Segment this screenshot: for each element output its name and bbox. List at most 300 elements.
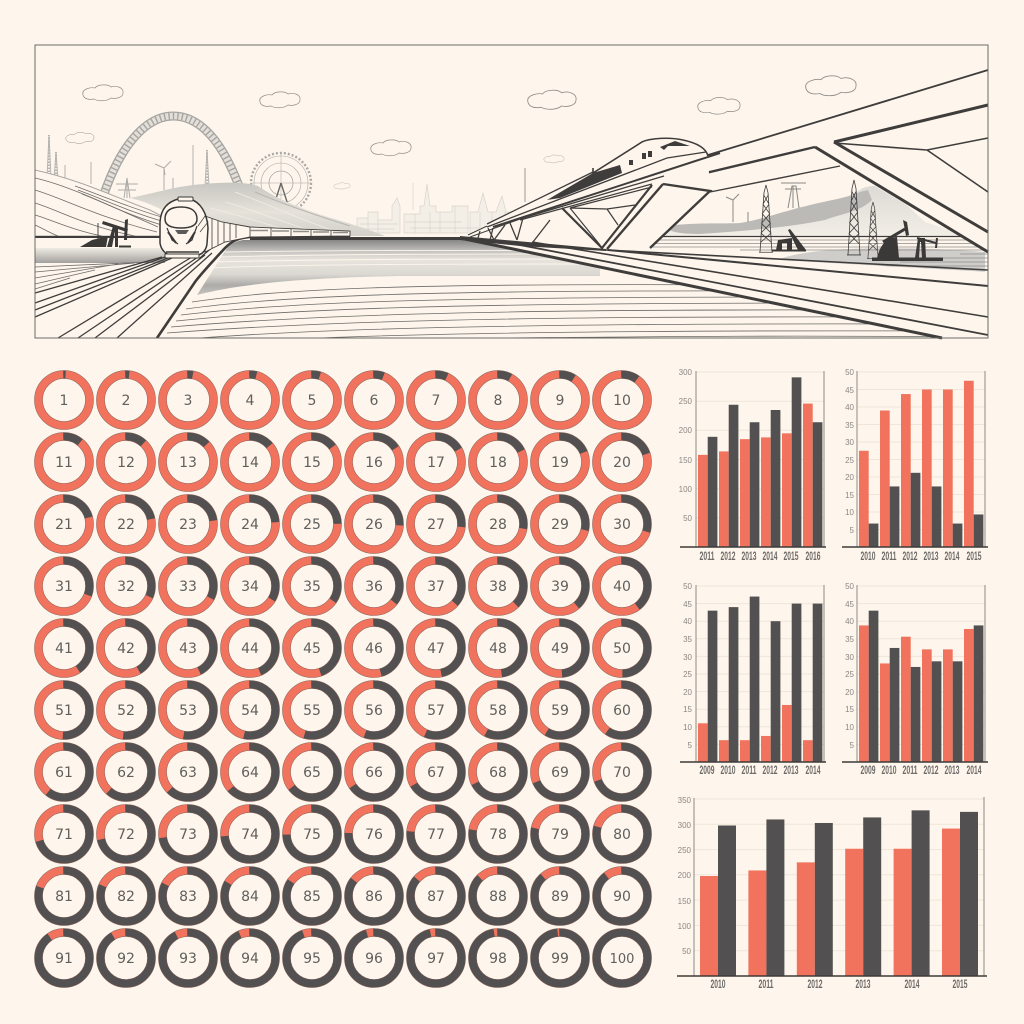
ring 62 bbox=[100, 746, 152, 798]
ring 30: 30 bbox=[613, 517, 631, 533]
bar chart 1: 2011 to 2016, scale 0 to 300: 50 bbox=[683, 514, 693, 523]
ring 46: 46 bbox=[365, 641, 383, 657]
donut grid: percentages 1 to 100 bbox=[38, 374, 648, 984]
lower deck beams bbox=[460, 236, 988, 338]
ring 60: 60 bbox=[613, 703, 631, 719]
ring 60 bbox=[596, 684, 648, 736]
ring 51 bbox=[38, 684, 90, 736]
ring 43: 43 bbox=[179, 641, 197, 657]
ring 33: 33 bbox=[179, 579, 197, 595]
ring 97: 97 bbox=[427, 951, 445, 967]
ring 50: 50 bbox=[613, 641, 631, 657]
ring 41: 41 bbox=[55, 641, 73, 657]
ring 14: 14 bbox=[241, 455, 259, 471]
bar chart 1: 2011 to 2016, scale 0 to 300: 250 bbox=[679, 397, 693, 406]
bar chart 2: 2010 to 2015, scale 0 to 50: 2014 bbox=[944, 551, 960, 563]
bar chart 3: 2009 to 2014, scale 0 to 50: 2012 bbox=[762, 765, 778, 777]
ring 61 bbox=[38, 746, 90, 798]
bar chart 3: 2009 to 2014, scale 0 to 50: 20 bbox=[683, 688, 693, 697]
bar chart 1: 2011 to 2016, scale 0 to 300: 2011 bbox=[700, 551, 715, 563]
ring 34 bbox=[224, 560, 276, 612]
ring 56 bbox=[348, 684, 400, 736]
ring 95: 95 bbox=[303, 951, 321, 967]
bar chart 2: 2010 to 2015, scale 0 to 50: 50 bbox=[845, 368, 855, 377]
bar chart 1: 2011 to 2016, scale 0 to 300: 2012 bbox=[720, 551, 736, 563]
bar chart 2: 2010 to 2015, scale 0 to 50: 25 bbox=[845, 456, 855, 465]
ring 22 bbox=[100, 498, 152, 550]
ring 7 bbox=[410, 374, 462, 426]
ring 80: 80 bbox=[613, 827, 631, 843]
ring 43 bbox=[162, 622, 214, 674]
ring 8: 8 bbox=[494, 393, 502, 409]
bar chart 3: 2009 to 2014, scale 0 to 50: 45 bbox=[683, 600, 693, 609]
bar chart 2: 2010 to 2015, scale 0 to 50: 45 bbox=[845, 386, 855, 395]
bar chart 5: 2010 to 2015, scale 0 to 350: 2010 bbox=[710, 979, 726, 991]
ring 17 bbox=[410, 436, 462, 488]
ring 30 bbox=[596, 498, 648, 550]
ring 39 bbox=[534, 560, 586, 612]
bar chart 3: 2009 to 2014, scale 0 to 50: 15 bbox=[683, 705, 693, 714]
ring 13 bbox=[162, 436, 214, 488]
ring 62: 62 bbox=[117, 765, 135, 781]
ring 11 bbox=[38, 436, 90, 488]
bar chart 1: 2011 to 2016, scale 0 to 300: 2015 bbox=[784, 551, 799, 563]
ring 98: 98 bbox=[489, 951, 507, 967]
ring 84 bbox=[224, 870, 276, 922]
ring 65 bbox=[286, 746, 338, 798]
bar chart 2: 2010 to 2015, scale 0 to 50: 2013 bbox=[924, 551, 938, 563]
ring 85: 85 bbox=[303, 889, 321, 905]
left ridge with contour lines bbox=[35, 170, 200, 236]
ring 23: 23 bbox=[179, 517, 197, 533]
ring 5: 5 bbox=[308, 393, 316, 409]
left field lines bbox=[35, 262, 150, 289]
ring 90: 90 bbox=[613, 889, 631, 905]
ring 26: 26 bbox=[365, 517, 383, 533]
ring 33 bbox=[162, 560, 214, 612]
ring 5 bbox=[286, 374, 338, 426]
ring 18 bbox=[472, 436, 524, 488]
bar chart 5: 2010 to 2015, scale 0 to 350: 250 bbox=[678, 846, 692, 855]
ring 84: 84 bbox=[241, 889, 259, 905]
ring 27: 27 bbox=[427, 517, 445, 533]
bar chart 5: 2010 to 2015, scale 0 to 350: 2015 bbox=[952, 979, 968, 991]
ring 81 bbox=[38, 870, 90, 922]
ring 93 bbox=[162, 932, 214, 984]
bar chart 3: 2009 to 2014, scale 0 to 50: 30 bbox=[683, 653, 693, 662]
ring 19 bbox=[534, 436, 586, 488]
ring 57 bbox=[410, 684, 462, 736]
ring 6 bbox=[348, 374, 400, 426]
ring 91: 91 bbox=[55, 951, 73, 967]
panel: railway panorama illustration bbox=[35, 45, 988, 338]
ring 4: 4 bbox=[246, 393, 255, 409]
ring 36 bbox=[348, 560, 400, 612]
bar chart 3: 2009 to 2014, scale 0 to 50: 10 bbox=[683, 723, 693, 732]
horizon dark strip bbox=[250, 237, 480, 240]
ring 24: 24 bbox=[241, 517, 259, 533]
ring 92: 92 bbox=[117, 951, 135, 967]
ring 53 bbox=[162, 684, 214, 736]
bar chart 1: 2011 to 2016, scale 0 to 300: 200 bbox=[679, 426, 693, 435]
ring 4 bbox=[224, 374, 276, 426]
ring 44 bbox=[224, 622, 276, 674]
ring 71: 71 bbox=[55, 827, 73, 843]
bar chart 4: 2009 to 2014, scale 0 to 50: 2014 bbox=[966, 765, 982, 777]
central dune hill bbox=[130, 183, 385, 236]
bar chart 2: 2010 to 2015, scale 0 to 50: 10 bbox=[845, 508, 855, 517]
ring 15: 15 bbox=[303, 455, 321, 471]
ring 86: 86 bbox=[365, 889, 383, 905]
ring 80 bbox=[596, 808, 648, 860]
bar chart 4: 2009 to 2014, scale 0 to 50: 15 bbox=[845, 705, 855, 714]
ring 63: 63 bbox=[179, 765, 197, 781]
ring 50 bbox=[596, 622, 648, 674]
bar chart 2: 2010 to 2015, scale 0 to 50 bbox=[842, 368, 988, 563]
bar chart 4: 2009 to 2014, scale 0 to 50: 40 bbox=[845, 617, 855, 626]
ring 54: 54 bbox=[241, 703, 259, 719]
ring 46 bbox=[348, 622, 400, 674]
bar chart 2: 2010 to 2015, scale 0 to 50: 30 bbox=[845, 438, 855, 447]
bar chart 2: 2010 to 2015, scale 0 to 50: 2012 bbox=[902, 551, 918, 563]
ring 27 bbox=[410, 498, 462, 550]
bar chart 5: 2010 to 2015, scale 0 to 350 bbox=[677, 796, 987, 991]
bar chart 4: 2009 to 2014, scale 0 to 50: 25 bbox=[845, 670, 855, 679]
high-speed train front bbox=[160, 197, 208, 258]
ring 82 bbox=[100, 870, 152, 922]
bar chart 2: 2010 to 2015, scale 0 to 50: 2011 bbox=[882, 551, 897, 563]
ring 88 bbox=[472, 870, 524, 922]
ring 47 bbox=[410, 622, 462, 674]
small pump jack bbox=[772, 229, 806, 252]
ring 78: 78 bbox=[489, 827, 507, 843]
bar chart 3: 2009 to 2014, scale 0 to 50: 2013 bbox=[784, 765, 798, 777]
ring 63 bbox=[162, 746, 214, 798]
ring 97 bbox=[410, 932, 462, 984]
bar chart 1: 2011 to 2016, scale 0 to 300: 2013 bbox=[742, 551, 756, 563]
ring 42 bbox=[100, 622, 152, 674]
bar chart 2: 2010 to 2015, scale 0 to 50: 5 bbox=[850, 526, 855, 535]
ring 47: 47 bbox=[427, 641, 445, 657]
ring 37 bbox=[410, 560, 462, 612]
ring 20: 20 bbox=[613, 455, 631, 471]
bar chart 4: 2009 to 2014, scale 0 to 50: 45 bbox=[845, 600, 855, 609]
ring 9: 9 bbox=[556, 393, 564, 409]
bar chart 5: 2010 to 2015, scale 0 to 350: 100 bbox=[678, 922, 692, 931]
ring 90 bbox=[596, 870, 648, 922]
ring 99 bbox=[534, 932, 586, 984]
ring 71 bbox=[38, 808, 90, 860]
ring 69: 69 bbox=[551, 765, 569, 781]
ring 31 bbox=[38, 560, 90, 612]
bar chart 2: 2010 to 2015, scale 0 to 50: 40 bbox=[845, 403, 855, 412]
ring 68: 68 bbox=[489, 765, 507, 781]
ring 72: 72 bbox=[117, 827, 135, 843]
ring 76 bbox=[348, 808, 400, 860]
wind turbines and pylon bbox=[116, 161, 173, 198]
bullet train on the bridge bbox=[487, 138, 708, 227]
ring 25 bbox=[286, 498, 338, 550]
ring 19: 19 bbox=[551, 455, 569, 471]
ring 2: 2 bbox=[122, 393, 130, 409]
ring 76: 76 bbox=[365, 827, 383, 843]
ring 39: 39 bbox=[551, 579, 569, 595]
ring 29: 29 bbox=[551, 517, 569, 533]
ring 99: 99 bbox=[551, 951, 569, 967]
bar chart 2: 2010 to 2015, scale 0 to 50: 15 bbox=[845, 491, 855, 500]
ring 85 bbox=[286, 870, 338, 922]
ring 59: 59 bbox=[551, 703, 569, 719]
ring 73: 73 bbox=[179, 827, 197, 843]
ring 64: 64 bbox=[241, 765, 259, 781]
ring 77 bbox=[410, 808, 462, 860]
ring 88: 88 bbox=[489, 889, 507, 905]
ring 82: 82 bbox=[117, 889, 135, 905]
ring 12: 12 bbox=[117, 455, 135, 471]
bar chart 4: 2009 to 2014, scale 0 to 50: 2009 bbox=[860, 765, 876, 777]
bar chart 3: 2009 to 2014, scale 0 to 50: 2014 bbox=[806, 765, 821, 777]
ring 48 bbox=[472, 622, 524, 674]
ring 67: 67 bbox=[427, 765, 445, 781]
ring 3 bbox=[162, 374, 214, 426]
receding train carriages bbox=[205, 216, 350, 252]
ring 8 bbox=[472, 374, 524, 426]
ring 21: 21 bbox=[55, 517, 73, 533]
bar chart 3: 2009 to 2014, scale 0 to 50: 50 bbox=[683, 582, 693, 591]
bar chart 1: 2011 to 2016, scale 0 to 300: 2014 bbox=[762, 551, 778, 563]
bar chart 3: 2009 to 2014, scale 0 to 50: 2010 bbox=[720, 765, 736, 777]
bar chart 5: 2010 to 2015, scale 0 to 350: 350 bbox=[678, 796, 692, 805]
railway tracks bbox=[35, 237, 350, 338]
ring 65: 65 bbox=[303, 765, 321, 781]
ring 96: 96 bbox=[365, 951, 383, 967]
ring 64 bbox=[224, 746, 276, 798]
elevated bridge: upper beams bbox=[668, 70, 988, 252]
horizon line bbox=[35, 236, 160, 238]
ring 68 bbox=[472, 746, 524, 798]
bar chart 3: 2009 to 2014, scale 0 to 50: 5 bbox=[688, 741, 693, 750]
ring 78 bbox=[472, 808, 524, 860]
ring 93: 93 bbox=[179, 951, 197, 967]
ring 13: 13 bbox=[179, 455, 197, 471]
ring 55 bbox=[286, 684, 338, 736]
bar chart 5: 2010 to 2015, scale 0 to 350: 2012 bbox=[808, 979, 822, 991]
distant chimneys and masts bbox=[47, 135, 209, 187]
view under the bridge: hills, lines, towers, pump jacks bbox=[625, 180, 988, 272]
ring 16 bbox=[348, 436, 400, 488]
ring 74: 74 bbox=[241, 827, 259, 843]
bar chart 3: 2009 to 2014, scale 0 to 50: 35 bbox=[683, 635, 693, 644]
ring 54 bbox=[224, 684, 276, 736]
bar chart 5: 2010 to 2015, scale 0 to 350: 300 bbox=[678, 821, 692, 830]
bar chart 4: 2009 to 2014, scale 0 to 50: 50 bbox=[845, 582, 855, 591]
ring 10 bbox=[596, 374, 648, 426]
ring 79: 79 bbox=[551, 827, 569, 843]
bar chart 5: 2010 to 2015, scale 0 to 350: 2014 bbox=[904, 979, 920, 991]
ring 20 bbox=[596, 436, 648, 488]
ring 94 bbox=[224, 932, 276, 984]
ring 48: 48 bbox=[489, 641, 507, 657]
ring 25: 25 bbox=[303, 517, 321, 533]
bar chart 4: 2009 to 2014, scale 0 to 50 bbox=[842, 582, 988, 777]
bar chart 1: 2011 to 2016, scale 0 to 300: 150 bbox=[679, 456, 693, 465]
ring 91 bbox=[38, 932, 90, 984]
ring 7: 7 bbox=[432, 393, 440, 409]
ring 15 bbox=[286, 436, 338, 488]
ring 32: 32 bbox=[117, 579, 135, 595]
ring 70: 70 bbox=[613, 765, 631, 781]
bar chart 2: 2010 to 2015, scale 0 to 50: 2015 bbox=[966, 551, 982, 563]
ring 96 bbox=[348, 932, 400, 984]
bar chart 5: 2010 to 2015, scale 0 to 350: 50 bbox=[682, 947, 692, 956]
ring 41 bbox=[38, 622, 90, 674]
ring 21 bbox=[38, 498, 90, 550]
ring 86 bbox=[348, 870, 400, 922]
ring 1: 1 bbox=[60, 393, 68, 409]
bar chart 4: 2009 to 2014, scale 0 to 50: 20 bbox=[845, 688, 855, 697]
ring 9 bbox=[534, 374, 586, 426]
city skyline bbox=[357, 168, 525, 233]
ring 29 bbox=[534, 498, 586, 550]
ring 23 bbox=[162, 498, 214, 550]
ring 100: 100 bbox=[610, 952, 634, 967]
ring 52: 52 bbox=[117, 703, 135, 719]
ring 35: 35 bbox=[303, 579, 321, 595]
ring 32 bbox=[100, 560, 152, 612]
ring 35 bbox=[286, 560, 338, 612]
ring 98 bbox=[472, 932, 524, 984]
ring 11: 11 bbox=[55, 455, 73, 471]
ring 49 bbox=[534, 622, 586, 674]
ring 81: 81 bbox=[55, 889, 73, 905]
ring 92 bbox=[100, 932, 152, 984]
ring 1 bbox=[38, 374, 90, 426]
bar chart 5: 2010 to 2015, scale 0 to 350: 2011 bbox=[758, 979, 774, 991]
ring 74 bbox=[224, 808, 276, 860]
ring 2 bbox=[100, 374, 152, 426]
ring 53: 53 bbox=[179, 703, 197, 719]
bar chart 4: 2009 to 2014, scale 0 to 50: 2011 bbox=[902, 765, 918, 777]
ring 12 bbox=[100, 436, 152, 488]
ring 66 bbox=[348, 746, 400, 798]
ring 51: 51 bbox=[55, 703, 73, 719]
left grey band bbox=[35, 248, 165, 263]
ring 14 bbox=[224, 436, 276, 488]
ring 31: 31 bbox=[55, 579, 73, 595]
ring 38: 38 bbox=[489, 579, 507, 595]
ring 22: 22 bbox=[117, 517, 135, 533]
ring 79 bbox=[534, 808, 586, 860]
ring 83: 83 bbox=[179, 889, 197, 905]
ring 72 bbox=[100, 808, 152, 860]
ring 52 bbox=[100, 684, 152, 736]
ring 36: 36 bbox=[365, 579, 383, 595]
bridge deck and struts bbox=[468, 153, 720, 250]
ring 38 bbox=[472, 560, 524, 612]
ring 75: 75 bbox=[303, 827, 321, 843]
ring 42: 42 bbox=[117, 641, 135, 657]
ring 69 bbox=[534, 746, 586, 798]
ring 10: 10 bbox=[613, 393, 631, 409]
bar chart 3: 2009 to 2014, scale 0 to 50: 2011 bbox=[742, 765, 757, 777]
bar chart 2: 2010 to 2015, scale 0 to 50: 2010 bbox=[860, 551, 876, 563]
middle grey field band bbox=[197, 240, 600, 295]
ring 75 bbox=[286, 808, 338, 860]
ring 58 bbox=[472, 684, 524, 736]
ring 3: 3 bbox=[184, 393, 192, 409]
ring 73 bbox=[162, 808, 214, 860]
ring 57: 57 bbox=[427, 703, 445, 719]
bar chart 4: 2009 to 2014, scale 0 to 50: 35 bbox=[845, 635, 855, 644]
ring 70 bbox=[596, 746, 648, 798]
bar chart 3: 2009 to 2014, scale 0 to 50: 2009 bbox=[700, 765, 714, 777]
bar chart 1: 2011 to 2016, scale 0 to 300 bbox=[679, 368, 826, 563]
ring 77: 77 bbox=[427, 827, 445, 843]
big pump jacks bbox=[872, 220, 943, 261]
ring 28: 28 bbox=[489, 517, 507, 533]
ring 61: 61 bbox=[55, 765, 73, 781]
ring 83 bbox=[162, 870, 214, 922]
ring 89: 89 bbox=[551, 889, 569, 905]
ring 55: 55 bbox=[303, 703, 321, 719]
ring 67 bbox=[410, 746, 462, 798]
bar chart 4: 2009 to 2014, scale 0 to 50: 2013 bbox=[944, 765, 960, 777]
bar chart 5: 2010 to 2015, scale 0 to 350: 200 bbox=[678, 871, 692, 880]
ferris wheel bbox=[251, 153, 311, 213]
bar chart 1: 2011 to 2016, scale 0 to 300: 300 bbox=[679, 368, 693, 377]
ring 56: 56 bbox=[365, 703, 383, 719]
ring 89 bbox=[534, 870, 586, 922]
ring 87 bbox=[410, 870, 462, 922]
ring 34: 34 bbox=[241, 579, 259, 595]
frame bbox=[35, 45, 988, 338]
arch bridge bbox=[104, 116, 239, 194]
ring 16: 16 bbox=[365, 455, 383, 471]
ring 17: 17 bbox=[427, 455, 445, 471]
bar chart 3: 2009 to 2014, scale 0 to 50: 25 bbox=[683, 670, 693, 679]
ring 6: 6 bbox=[370, 393, 379, 409]
ring 24 bbox=[224, 498, 276, 550]
bar chart 2: 2010 to 2015, scale 0 to 50: 35 bbox=[845, 421, 855, 430]
ring 66: 66 bbox=[365, 765, 383, 781]
bar chart 2: 2010 to 2015, scale 0 to 50: 20 bbox=[845, 473, 855, 482]
ring 59 bbox=[534, 684, 586, 736]
ring 58: 58 bbox=[489, 703, 507, 719]
bar chart 1: 2011 to 2016, scale 0 to 300: 2016 bbox=[806, 551, 820, 563]
ring 45: 45 bbox=[303, 641, 321, 657]
ring 44: 44 bbox=[241, 641, 259, 657]
ring 26 bbox=[348, 498, 400, 550]
bar chart 1: 2011 to 2016, scale 0 to 300: 100 bbox=[679, 485, 693, 494]
ring 37: 37 bbox=[427, 579, 445, 595]
bar chart 4: 2009 to 2014, scale 0 to 50: 2010 bbox=[882, 765, 896, 777]
ring 94: 94 bbox=[241, 951, 259, 967]
ring 45 bbox=[286, 622, 338, 674]
ring 95 bbox=[286, 932, 338, 984]
ring 40 bbox=[596, 560, 648, 612]
bar chart 3: 2009 to 2014, scale 0 to 50: 40 bbox=[683, 617, 693, 626]
ring 87: 87 bbox=[427, 889, 445, 905]
bar chart 4: 2009 to 2014, scale 0 to 50: 30 bbox=[845, 653, 855, 662]
bar chart 5: 2010 to 2015, scale 0 to 350: 150 bbox=[678, 897, 692, 906]
ring 40: 40 bbox=[613, 579, 631, 595]
ring 28 bbox=[472, 498, 524, 550]
pump jack left bbox=[80, 219, 131, 248]
ring 49: 49 bbox=[551, 641, 569, 657]
ring 100 bbox=[596, 932, 648, 984]
bar chart 3: 2009 to 2014, scale 0 to 50 bbox=[680, 582, 826, 777]
bar chart 4: 2009 to 2014, scale 0 to 50: 10 bbox=[845, 723, 855, 732]
